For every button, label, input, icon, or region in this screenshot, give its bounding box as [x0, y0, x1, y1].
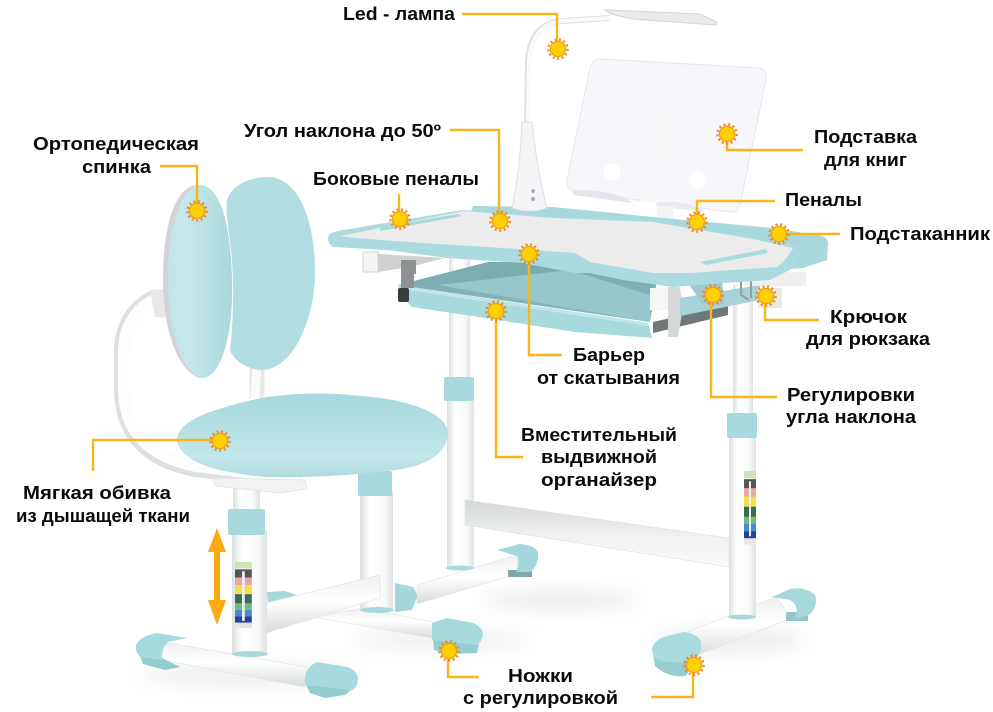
label: tilt adjustment: угла наклона: [786, 407, 917, 427]
desk brackets: [363, 252, 806, 337]
marker: backpack hook: [756, 286, 776, 306]
label: anti-roll barrier: [537, 345, 680, 388]
chair: rear foot: [267, 591, 483, 654]
led lamp: [512, 10, 717, 211]
label: backpack hook: [806, 307, 931, 349]
marker: cup holder: [769, 224, 789, 244]
chair: front foot: [136, 633, 358, 698]
label: adjustable feet: Ножки: [508, 666, 573, 686]
marker: desk foot: [684, 655, 704, 675]
marker: book stand: [717, 124, 737, 144]
drawer rail: [653, 305, 728, 333]
marker: pencil tray: [687, 212, 707, 232]
marker: tilt angle: [490, 211, 510, 231]
label: orthopedic back: спинка: [82, 157, 152, 177]
marker: lamp: [548, 39, 568, 59]
desk: right foot: [652, 588, 816, 676]
label: backpack hook: для рюкзака: [806, 329, 931, 349]
label: orthopedic back: [33, 134, 199, 177]
label: organizer: Вместительный: [521, 425, 677, 445]
desk: crossbeam: [465, 500, 729, 567]
height sticker: [235, 562, 252, 628]
label: cup holder: Подстаканник: [850, 224, 991, 244]
label: anti-roll barrier: от скатывания: [537, 368, 680, 388]
desk: right leg: [727, 285, 757, 620]
height sticker: [744, 471, 756, 544]
label: organizer: органайзер: [541, 470, 657, 490]
floor shadows: [140, 590, 805, 685]
label: organizer: выдвижной: [541, 447, 657, 467]
label: backpack hook: Крючок: [830, 307, 908, 327]
label: soft upholstery: [16, 483, 190, 526]
label: tilt adjustment: Регулировки: [787, 385, 915, 405]
desk: rear left leg: [444, 258, 474, 570]
label: book stand: Подставка: [814, 127, 918, 147]
book stand: [567, 59, 766, 220]
marker: soft upholstery: [210, 431, 230, 451]
desk: rear left foot: [395, 544, 538, 612]
marker: anti-roll barrier: [519, 244, 539, 264]
marker: side pencil case: [390, 209, 410, 229]
chair: rear column: [358, 471, 394, 613]
marker: organizer: [486, 301, 506, 321]
chair: front column: [228, 486, 268, 657]
label: Led lamp: Led - лампа: [343, 4, 456, 24]
leader lines: [93, 14, 840, 697]
label: soft upholstery: из дышащей ткани: [16, 506, 190, 526]
drawer: [398, 262, 728, 338]
label: book stand: [814, 127, 918, 170]
label: book stand: для книг: [824, 150, 908, 170]
label: adjustable feet: [463, 666, 618, 708]
label: anti-roll barrier: Барьер: [573, 345, 645, 365]
label: tilt angle: Угол наклона до 50º: [244, 121, 441, 141]
label: adjustable feet: с регулировкой: [463, 688, 618, 708]
book stand holes: [604, 164, 620, 180]
height arrow: [208, 528, 226, 625]
marker: orthopedic back: [187, 201, 207, 221]
chair: back support tube: [122, 288, 307, 493]
desk top: [328, 206, 828, 287]
chair: backrest: [163, 177, 315, 378]
label: side pencil cases: Боковые пеналы: [313, 169, 479, 189]
chair: crossbar: [266, 575, 380, 633]
drawer roller: [398, 288, 409, 302]
chair: seat: [177, 394, 448, 477]
label: organizer: [521, 425, 677, 490]
label: orthopedic back: Ортопедическая: [33, 134, 199, 154]
label: tilt adjustment: [786, 385, 917, 427]
label: soft upholstery: Мягкая обивка: [23, 483, 172, 503]
marker: chair foot: [439, 641, 459, 661]
marker: tilt adjustment: [703, 285, 723, 305]
label: pencil trays: Пеналы: [785, 190, 862, 210]
